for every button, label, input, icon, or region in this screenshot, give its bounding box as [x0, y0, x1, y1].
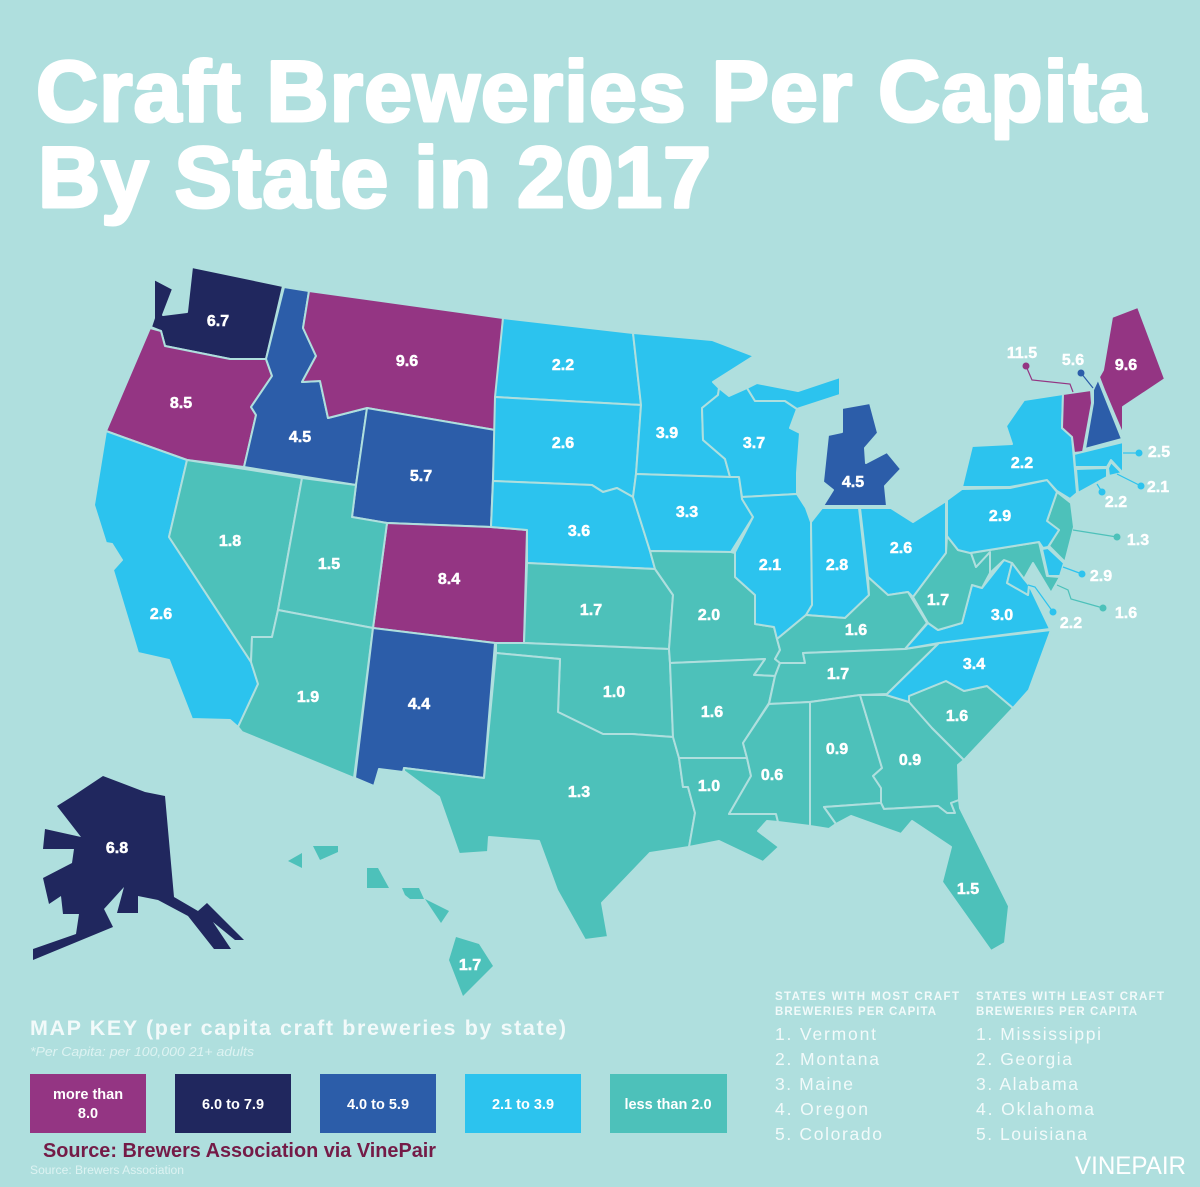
callout: New Jersey 1.3: 1.3: [1127, 532, 1149, 549]
state: Tennessee: [769, 644, 938, 704]
state: Virginia: [905, 560, 1050, 649]
state: Louisiana: 1.0: [698, 778, 720, 795]
list: states with most craft breweries: 2. Montana: [775, 1049, 879, 1069]
state: Indiana: 2.8: [826, 557, 848, 574]
state: District of Columbia: [1007, 563, 1029, 595]
callout: Massachusetts 2.5: [1123, 444, 1170, 461]
list: states with least craft breweries: [976, 991, 1164, 1144]
state: New York: 2.2: [1011, 455, 1033, 472]
state: Arizona: 1.9: [297, 689, 319, 706]
state: Missouri: 2.0: [698, 607, 720, 624]
list: states with least craft breweries: BREWERIES PER CAPITA: [976, 1006, 1137, 1018]
title: By State in 2017: [38, 130, 711, 226]
state: West Virginia: [913, 536, 990, 630]
list: states with least craft breweries: 4. Oklahoma: [976, 1099, 1094, 1119]
state: New Mexico: [355, 628, 495, 786]
list: states with least craft breweries: 3. Alabama: [976, 1074, 1078, 1094]
callout: Delaware 2.9: [1063, 567, 1112, 585]
state: Wyoming: [352, 408, 495, 527]
legend: more than 8.0: [30, 1074, 146, 1133]
callout: District of Columbia 2.2: 2.2: [1060, 615, 1082, 632]
state: Nebraska: 3.6: [568, 523, 590, 540]
state: Kansas: [524, 563, 673, 649]
state: South Dakota: 2.6: [552, 435, 574, 452]
state: Colorado: 8.4: [438, 571, 460, 588]
state: Washington: 6.7: [207, 313, 229, 330]
legend: 4.0 to 5.9: [320, 1074, 436, 1133]
state: Michigan: 4.5: [842, 474, 864, 491]
state: Oklahoma: [496, 643, 673, 737]
source: VinePair credit: Source: Brewers Association via VinePair: [43, 1140, 436, 1162]
state: Arkansas: [670, 659, 775, 758]
state: Iowa: [633, 474, 753, 552]
state: North Dakota: 2.2: [552, 357, 574, 374]
state: Texas: 1.3: [568, 784, 590, 801]
state: Ohio: 2.6: [890, 540, 912, 557]
state: Arizona: [238, 610, 373, 778]
state: Idaho: [244, 287, 367, 485]
state: Georgia: 0.9: [899, 752, 921, 769]
title: Craft Breweries Per Capita: [36, 44, 1147, 140]
callout: Delaware 2.9: 2.9: [1090, 568, 1112, 585]
state: Ohio: [860, 501, 946, 597]
legend: more than 8.0: 8.0: [78, 1106, 98, 1122]
state: Nevada: [169, 460, 302, 662]
state: Washington: [151, 267, 283, 359]
state: New York: [962, 394, 1077, 499]
state: Utah: [278, 478, 387, 628]
state: New Jersey: [1047, 492, 1074, 562]
map key heading: MAP KEY (per capita craft breweries by state): [30, 1016, 566, 1040]
state: Mississippi: [729, 702, 812, 826]
state: Nevada: 1.8: [219, 533, 241, 550]
state: Michigan upper peninsula: [747, 377, 840, 409]
legend: 6.0 to 7.9: 6.0 to 7.9: [202, 1097, 264, 1113]
state: Pennsylvania: 2.9: [989, 508, 1011, 525]
per capita note: *Per Capita: per 100,000 21+ adults: [30, 1045, 254, 1059]
state: Kentucky: [775, 577, 927, 663]
state: Montana: 9.6: [396, 353, 418, 370]
state: Tennessee: 1.7: [827, 666, 849, 683]
state: Iowa: 3.3: [676, 504, 698, 521]
list: states with most craft breweries: 3. Maine: [775, 1074, 853, 1094]
legend: 2.1 to 3.9: 2.1 to 3.9: [492, 1097, 554, 1113]
callout: Vermont 11.5: 11.5: [1007, 345, 1037, 362]
state: Kansas: 1.7: [580, 602, 602, 619]
callout: Maryland 1.6: [1057, 585, 1137, 622]
state: Maine: [1099, 307, 1165, 435]
state: Pennsylvania: [947, 480, 1059, 553]
state: Wyoming: 5.7: [410, 468, 432, 485]
state: California: [94, 431, 258, 727]
callout: New Jersey 1.3: [1073, 530, 1149, 549]
callout: Rhode Island 2.1: 2.1: [1147, 479, 1169, 496]
list: states with least craft breweries: 1. Mississippi: [976, 1024, 1101, 1044]
state: Mississippi: 0.6: [761, 767, 783, 784]
state: Minnesota: 3.9: [656, 425, 678, 442]
state: Illinois: [735, 494, 812, 639]
legend: 4.0 to 5.9: 4.0 to 5.9: [347, 1097, 409, 1113]
state: Louisiana: [679, 758, 779, 862]
callout: New Hampshire 5.6: 5.6: [1062, 352, 1084, 369]
state: Oregon: 8.5: [170, 395, 192, 412]
state: Texas: [404, 653, 695, 940]
state: California: 2.6: [150, 606, 172, 623]
state: Hawaii: [288, 846, 493, 996]
state: Maryland: [971, 542, 1060, 593]
list: states with most craft breweries: 4. Oregon: [775, 1099, 868, 1119]
state: South Carolina: [909, 681, 1013, 760]
state: Colorado: [373, 523, 527, 643]
state: West Virginia: 1.7: [927, 592, 949, 609]
legend: 6.0 to 7.9: [175, 1074, 291, 1133]
callout: Connecticut 2.2: [1097, 484, 1127, 511]
state: Delaware: [1042, 548, 1064, 576]
map of United States: [94, 267, 1165, 951]
state: Maine: 9.6: [1115, 357, 1137, 374]
legend: more than 8.0: more than: [53, 1087, 123, 1103]
callout: Maryland 1.6: 1.6: [1115, 605, 1137, 622]
list: states with least craft breweries: 5. Louisiana: [976, 1124, 1087, 1144]
state: North Dakota: [495, 318, 641, 405]
legend: less than 2.0: [610, 1074, 727, 1133]
state: Alaska: 6.8: [106, 840, 128, 857]
list: states with most craft breweries: 5. Colorado: [775, 1124, 882, 1144]
state: Wisconsin: [702, 388, 800, 497]
state: Vermont: [1062, 390, 1092, 453]
state: Connecticut: [1076, 468, 1107, 493]
state: Alabama: [810, 695, 882, 829]
VinePair logo: VINEPAIR: [1075, 1152, 1186, 1180]
legend: 2.1 to 3.9: [465, 1074, 581, 1133]
list: states with most craft breweries: STATES WITH MOST CRAFT: [775, 991, 959, 1003]
state: Arkansas: 1.6: [701, 704, 723, 721]
legend: less than 2.0: less than 2.0: [624, 1097, 712, 1113]
state: Massachusetts: [1074, 442, 1123, 473]
state: New Mexico: 4.4: [408, 696, 430, 713]
state: North Carolina: [886, 630, 1051, 708]
callout: New Hampshire 5.6: [1062, 352, 1093, 388]
state: North Carolina: 3.4: [963, 656, 985, 673]
state: Kentucky: 1.6: [845, 622, 867, 639]
callout: Vermont 11.5: [1007, 345, 1073, 392]
state: Minnesota: [633, 333, 754, 477]
state: Illinois: 2.1: [759, 557, 781, 574]
state: Indiana: [806, 508, 869, 618]
state: Nebraska: [491, 481, 655, 569]
callout: Connecticut 2.2: 2.2: [1105, 494, 1127, 511]
state: Oklahoma: 1.0: [603, 684, 625, 701]
list: states with most craft breweries: 1. Vermont: [775, 1024, 876, 1044]
source: small note: Source: Brewers Association: [30, 1165, 184, 1177]
callout: District of Columbia 2.2: [1028, 585, 1082, 632]
callout: Massachusetts 2.5: 2.5: [1148, 444, 1170, 461]
state: Hawaii: 1.7: [459, 957, 481, 974]
state: Oregon: [106, 328, 272, 467]
state: Montana: [302, 291, 503, 430]
state: New Hampshire: [1085, 379, 1122, 449]
list: states with least craft breweries: 2. Georgia: [976, 1049, 1072, 1069]
list: states with most craft breweries: BREWERIES PER CAPITA: [775, 1006, 936, 1018]
state: South Carolina: 1.6: [946, 708, 968, 725]
state: Michigan: [823, 403, 901, 506]
state: Florida: 1.5: [957, 881, 979, 898]
state: Wisconsin: 3.7: [743, 435, 765, 452]
state: Idaho: 4.5: [289, 429, 311, 446]
state: Alabama: 0.9: [826, 741, 848, 758]
state: Utah: 1.5: [318, 556, 340, 573]
state: Missouri: [650, 551, 780, 676]
list: states with most craft breweries: [775, 991, 959, 1144]
state: South Dakota: [493, 397, 641, 497]
title: [36, 44, 1147, 226]
state: Alaska: [33, 776, 244, 960]
state: Virginia: 3.0: [991, 607, 1013, 624]
state: Georgia: [860, 695, 964, 813]
state: Florida: [824, 800, 1009, 951]
list: states with least craft breweries: STATES WITH LEAST CRAFT: [976, 991, 1164, 1003]
callout: Rhode Island 2.1: [1117, 474, 1169, 496]
state: Rhode Island: [1108, 462, 1122, 476]
